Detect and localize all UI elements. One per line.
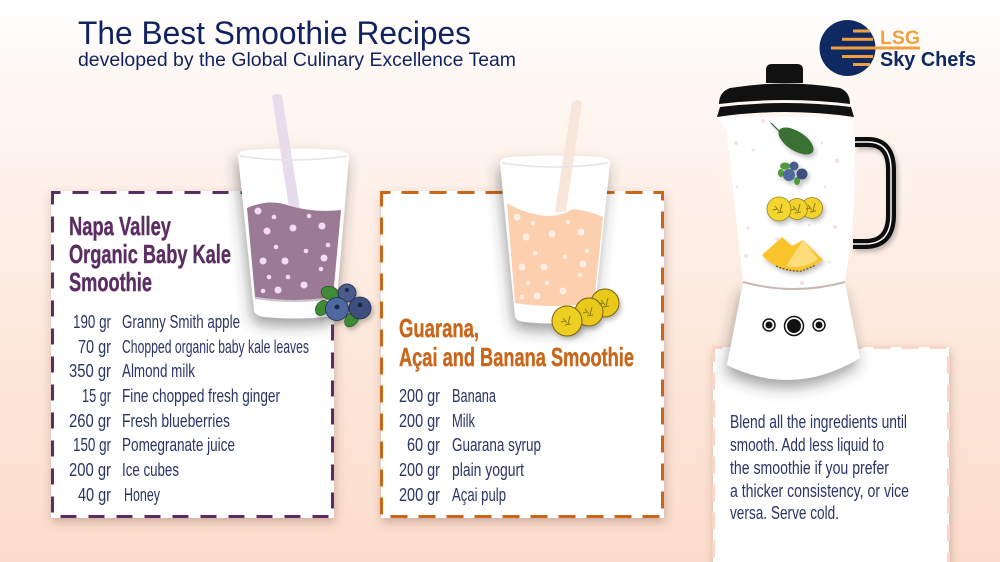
icon: purple smoothie glass (238, 94, 349, 318)
instructions text: a thicker consistency, or vice (730, 481, 909, 501)
title: The Best Smoothie Recipes (78, 15, 471, 51)
instructions text: the smoothie if you prefer (730, 458, 889, 478)
ingredient list: Guarana: 200 gr (399, 460, 440, 480)
panel: Napa Valley recipe (51, 191, 334, 518)
heading: Guarana, Acai and Banana Smoothie: Açai and Banana Smoothie (399, 342, 634, 372)
heading: Guarana, Acai and Banana Smoothie (399, 313, 634, 372)
heading: Napa Valley Organic Baby Kale Smoothie: Organic Baby Kale (69, 239, 231, 269)
instructions text: versa. Serve cold. (730, 503, 839, 523)
ingredient list: Napa Valley: Almond milk (122, 361, 196, 381)
icon: blueberries (313, 284, 371, 330)
heading: Napa Valley Organic Baby Kale Smoothie (69, 211, 231, 297)
ingredient list: Guarana (399, 386, 541, 505)
subtitle: developed by the Global Culinary Excellence Team (78, 50, 516, 71)
ingredient list: Napa Valley: 15 gr (82, 386, 111, 406)
jar dots (734, 119, 839, 285)
ingredient list: Napa Valley: Ice cubes (122, 460, 179, 480)
ingredient list: Guarana: Milk (452, 411, 476, 431)
logo: LSG Sky Chefs: Sky Chefs (880, 49, 976, 71)
icon: banana slices in jar (767, 197, 822, 221)
ingredient list: Guarana: plain yogurt (452, 460, 524, 480)
blender lid (717, 64, 854, 117)
icon: peach smoothie glass (500, 100, 610, 324)
icon: banana slices (552, 289, 619, 336)
ingredient list: Napa Valley: 40 gr (78, 485, 111, 505)
ingredient list: Napa Valley: Fine chopped fresh ginger (122, 386, 280, 406)
panel: instructions (713, 347, 949, 562)
ingredient list: Napa Valley: 70 gr (78, 337, 111, 357)
ingredient list: Guarana: Guarana syrup (452, 435, 541, 455)
ingredient list: Guarana: 200 gr (399, 411, 440, 431)
icon: blender (717, 64, 891, 380)
icon: small blueberries (778, 162, 808, 185)
ingredient list: Napa Valley: Fresh blueberries (122, 411, 230, 431)
instructions text (730, 412, 909, 523)
ingredient list: Napa Valley: Chopped organic baby kale leaves (122, 337, 309, 357)
instructions text: Blend all the ingredients until (730, 412, 907, 432)
blender handle (853, 142, 891, 244)
ingredient list: Guarana: 60 gr (407, 435, 440, 455)
heading: Napa Valley Organic Baby Kale Smoothie: Smoothie (69, 267, 152, 297)
heading: Napa Valley Organic Baby Kale Smoothie: Napa Valley (69, 211, 171, 241)
ingredient list: Napa Valley (69, 312, 309, 505)
ingredient list: Guarana: Açai pulp (452, 485, 506, 505)
ingredient list: Napa Valley: 150 gr (73, 435, 111, 455)
icon: kale leaf (771, 122, 818, 160)
ingredient list: Guarana: Banana (452, 386, 497, 406)
ingredient list: Napa Valley: Granny Smith apple (122, 312, 240, 332)
ingredient list: Guarana: 200 gr (399, 485, 440, 505)
blender base (727, 283, 860, 380)
ingredient list: Napa Valley: 190 gr (73, 312, 111, 332)
ingredient list: Napa Valley: 200 gr (69, 460, 111, 480)
logo: LSG Sky Chefs (820, 20, 976, 76)
heading: Guarana, Acai and Banana Smoothie: Guarana, (399, 313, 479, 343)
blender jar (717, 117, 855, 289)
logo: LSG Sky Chefs: LSG (880, 28, 920, 49)
ingredient list: Napa Valley: 350 gr (69, 361, 111, 381)
ingredient list: Napa Valley: 260 gr (69, 411, 111, 431)
ingredient list: Napa Valley: Pomegranate juice (122, 435, 235, 455)
blender buttons (763, 316, 825, 336)
panel: Guarana recipe (381, 191, 664, 518)
ingredient list: Guarana: 200 gr (399, 386, 440, 406)
ingredient list: Napa Valley: Honey (124, 485, 160, 505)
instructions text: smooth. Add less liquid to (730, 435, 884, 455)
icon: pineapple (762, 237, 823, 271)
